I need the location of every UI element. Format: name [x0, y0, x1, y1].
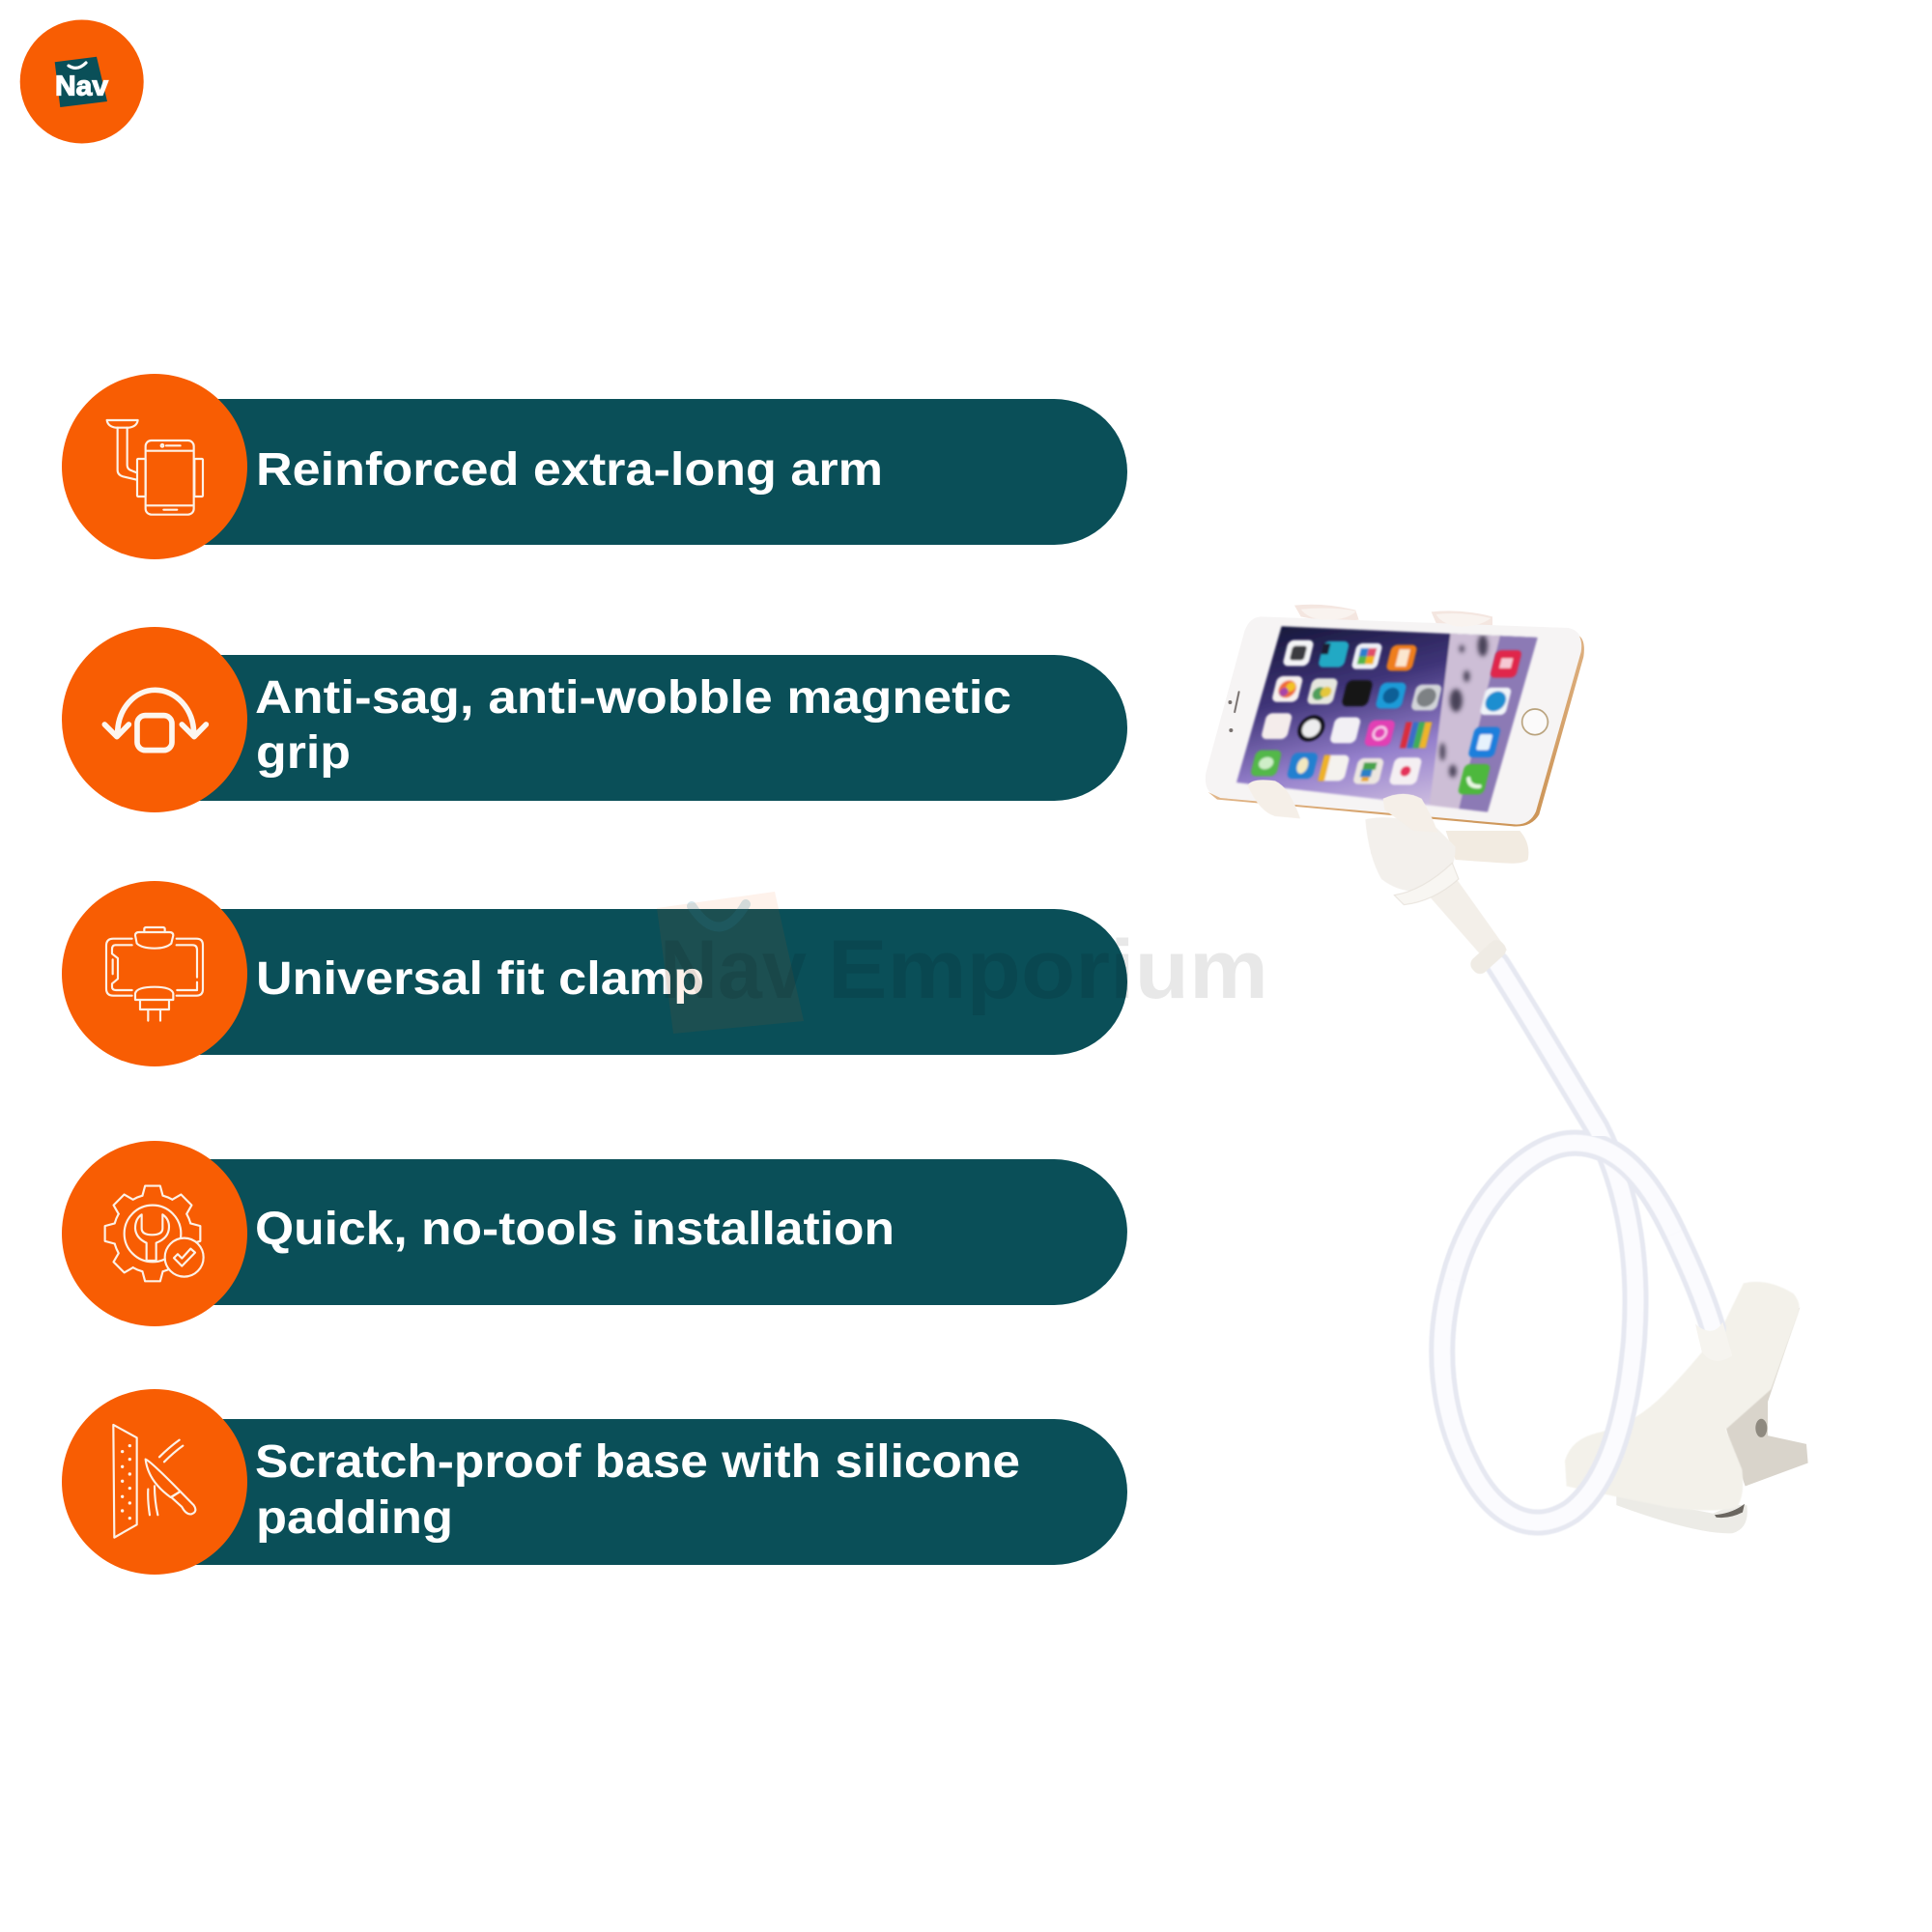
feature row 3: universal clamp: [62, 881, 1127, 1066]
clip bolt: [1755, 1419, 1767, 1437]
bar 4: [155, 1159, 1127, 1305]
neck collar: [1467, 937, 1509, 977]
label 3: Universal fit clamp: [256, 953, 704, 1005]
logo badge: Nav: [55, 71, 108, 102]
phone screen: [1236, 626, 1539, 813]
lower left grip: [1248, 780, 1300, 818]
label 2: Anti-sag, anti-wobble magnetic: [255, 672, 1011, 724]
icon: phone on arm: [107, 420, 203, 515]
clip lower pad edge: [1616, 1494, 1747, 1533]
label 5 second line: padding: [256, 1492, 453, 1544]
upper grips: [1294, 605, 1492, 630]
clip collar: [1695, 1321, 1732, 1361]
watermark text Emporium: Emporium: [828, 923, 1268, 1016]
bar 3: [155, 909, 1127, 1055]
wallpaper rock: [1430, 633, 1500, 810]
bar 2: [155, 655, 1127, 801]
circle 3: [62, 881, 247, 1066]
label 5: Scratch-proof base with silicone: [255, 1436, 1020, 1488]
circle 5: [62, 1389, 247, 1575]
feature row 1: reinforced arm: [62, 374, 1127, 559]
wallpaper dark marks: [1439, 635, 1488, 778]
icon: knife and pad: [113, 1425, 195, 1538]
watermark bag: [657, 892, 804, 1034]
neck: [1430, 877, 1507, 963]
home button: [1522, 709, 1548, 735]
arm top loop overlay: [1452, 1143, 1674, 1280]
circle 1: [62, 374, 247, 559]
earpiece: [1228, 691, 1240, 732]
icon: rotation arrows: [104, 690, 206, 751]
phone body: [1206, 616, 1581, 824]
label 2 second line: grip: [256, 727, 351, 779]
bar 1: [155, 399, 1127, 545]
collar: [1394, 863, 1459, 905]
feature row 2: magnetic grip: [62, 627, 1127, 812]
lower right grip: [1383, 794, 1437, 833]
feature row 5: scratch-proof base: [62, 1389, 1127, 1575]
clip dark shim: [1715, 1504, 1745, 1518]
ball joint: [1365, 817, 1456, 892]
product: clip base and flexible arm: [1442, 964, 1808, 1533]
watermark text Nav: Nav: [660, 923, 807, 1016]
right column: [1459, 635, 1539, 813]
app icons: [1250, 640, 1522, 794]
gold edge: [1208, 636, 1584, 827]
rear wing: [1446, 831, 1528, 864]
label 4: Quick, no-tools installation: [255, 1204, 895, 1255]
clip top body: [1565, 1282, 1800, 1511]
icon: clamp holding phone: [106, 927, 203, 1021]
clip side: [1726, 1307, 1808, 1486]
product: phone holder head: [1206, 605, 1584, 977]
logo badge: [20, 19, 144, 143]
watermark smile: [692, 904, 746, 927]
icon: gear and wrench: [105, 1186, 204, 1281]
circle 4: [62, 1141, 247, 1326]
upper grip fronts: [1301, 608, 1491, 627]
label 1: Reinforced extra-long arm: [256, 444, 883, 496]
feature row 4: quick install: [62, 1141, 1127, 1326]
flexible arm: [1442, 964, 1713, 1522]
circle 2: [62, 627, 247, 812]
bar 5: [155, 1419, 1127, 1565]
watermark: Nav Emporium: [657, 892, 1268, 1034]
